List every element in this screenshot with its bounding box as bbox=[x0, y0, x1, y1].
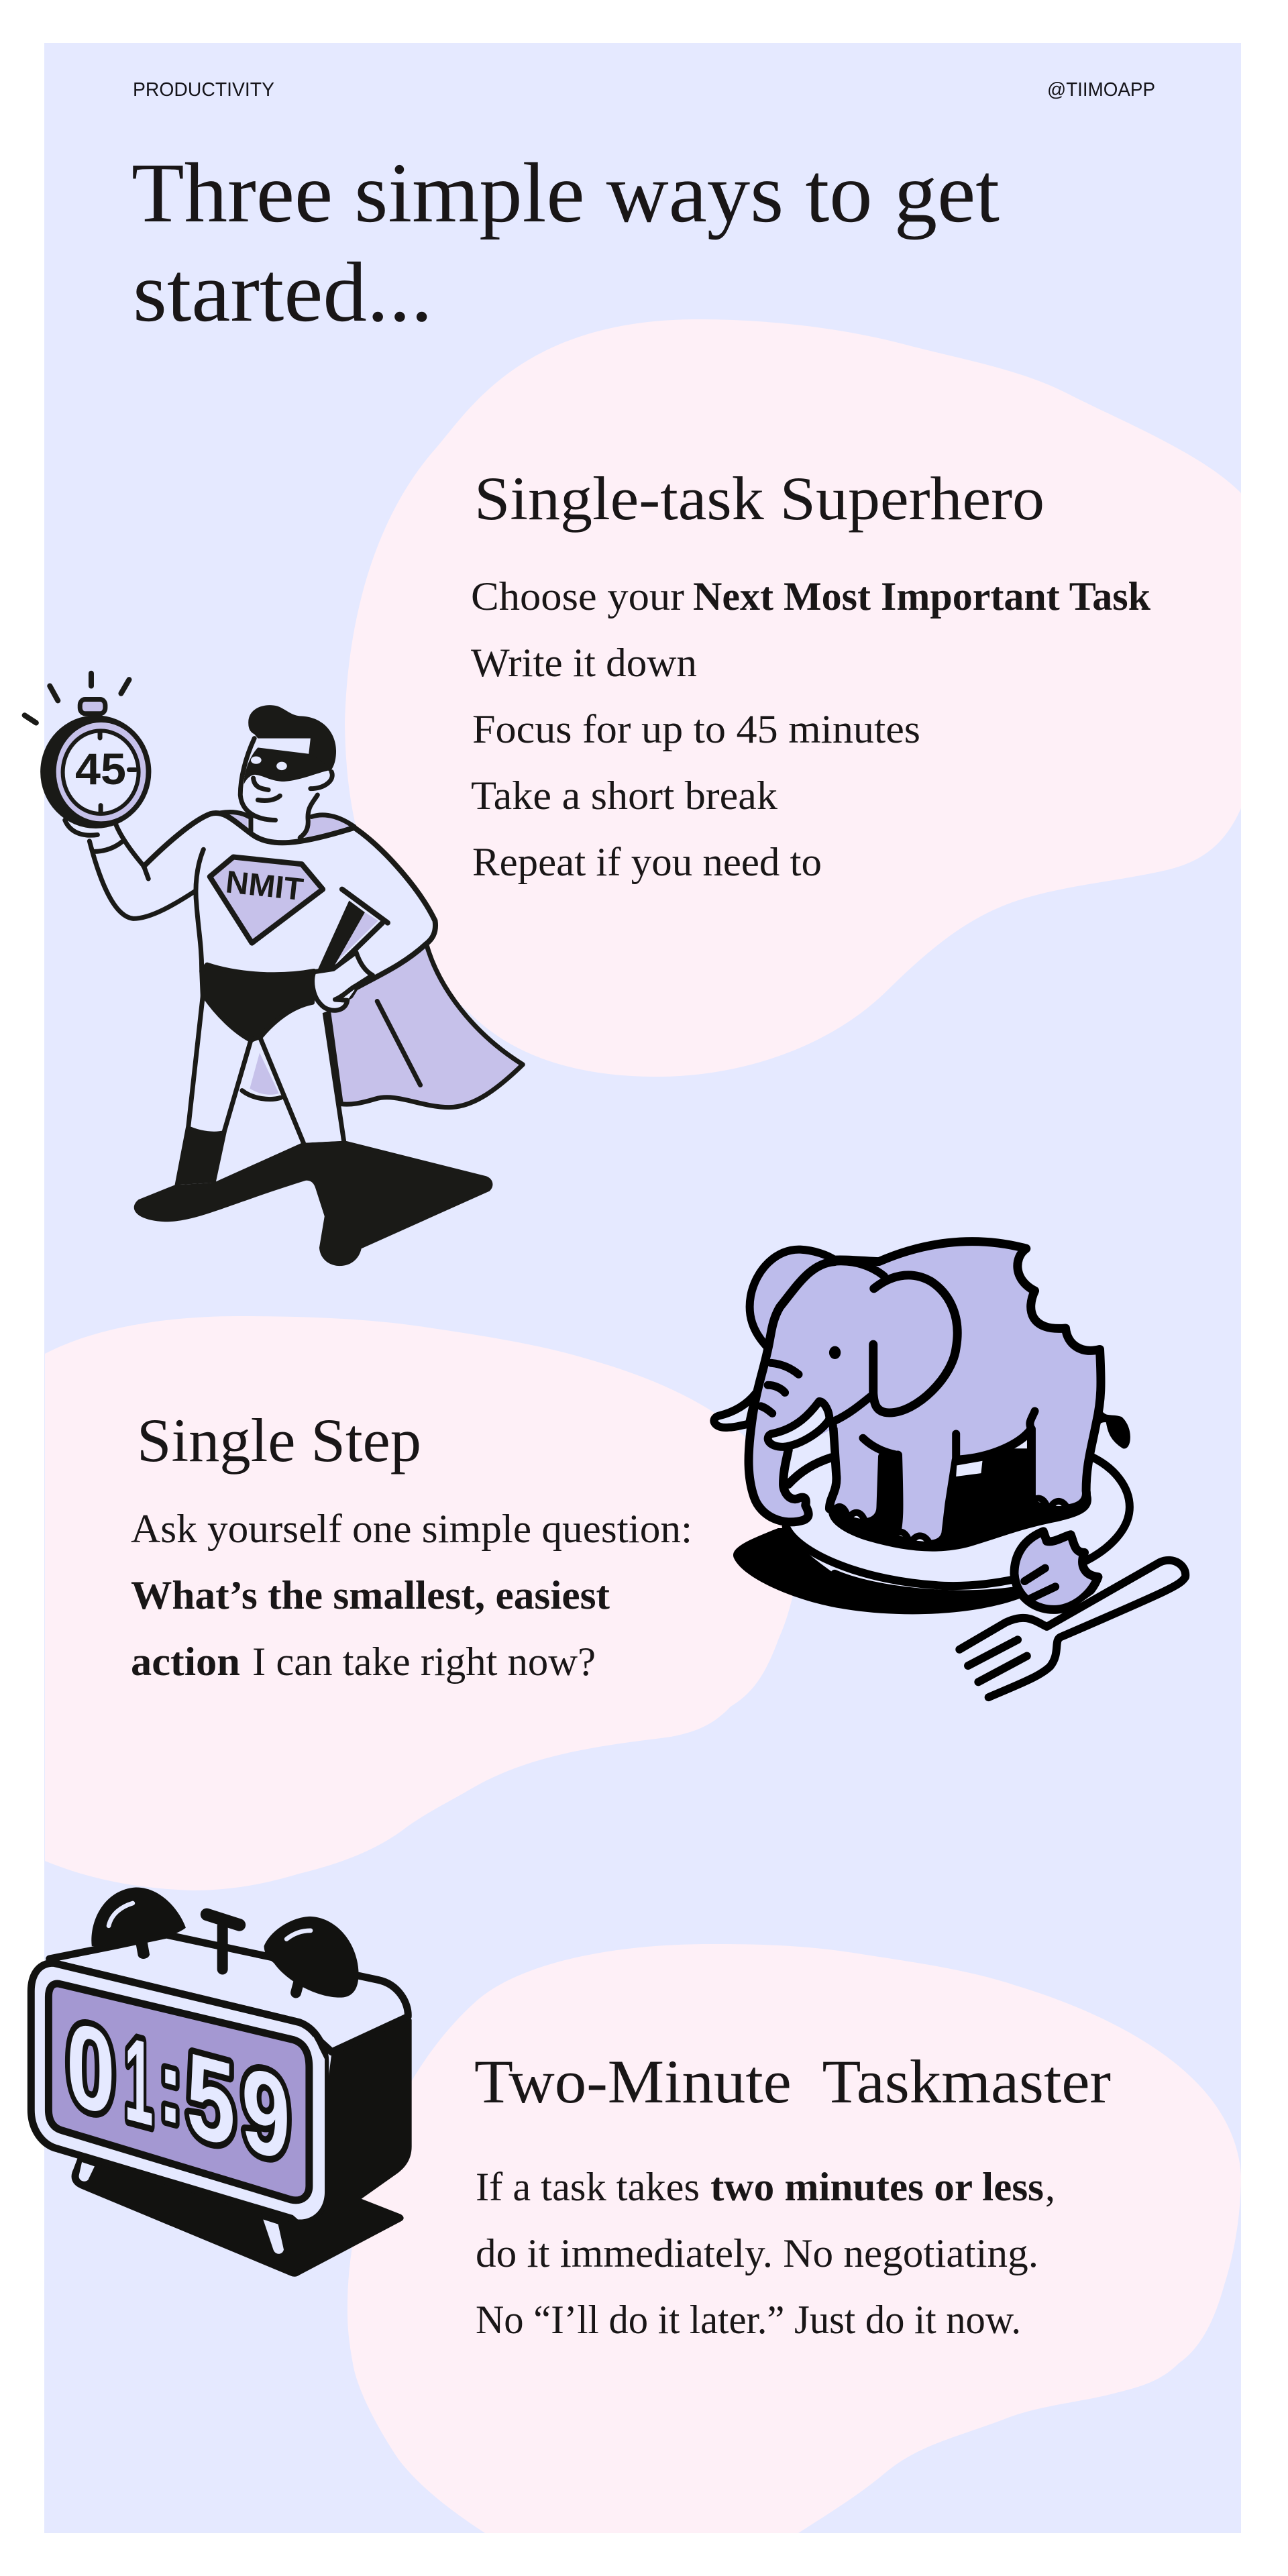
text block: two minute rule: No “I’ll do it later.” Just do it now. bbox=[476, 2298, 1021, 2342]
text block: superhero steps: Repeat if you need to bbox=[472, 840, 822, 884]
chest emblem text: NMIT bbox=[224, 863, 305, 907]
stopwatch number: 45 bbox=[75, 744, 126, 794]
text block: single step question bbox=[131, 1507, 692, 1684]
clock display digits: 0 bbox=[66, 1996, 115, 2141]
text block: superhero steps: Focus for up to 45 minutes bbox=[472, 707, 920, 751]
stopwatch bbox=[25, 674, 151, 828]
category label: PRODUCTIVITY bbox=[133, 79, 274, 101]
title bbox=[131, 146, 1000, 339]
handle label: @TIIMOAPP bbox=[1047, 79, 1155, 101]
elephant toes bbox=[834, 1499, 1068, 1546]
text block: two minute rule: two minutes or less bbox=[710, 2165, 1044, 2209]
clock display digits: 9 bbox=[241, 2041, 290, 2187]
clock display digits: 5 bbox=[186, 2027, 235, 2173]
illustration: superhero with stopwatch bbox=[25, 674, 523, 1266]
elephant head and trunk bbox=[749, 1262, 883, 1522]
text block: single step question: What’s the smallest, easiest bbox=[131, 1573, 610, 1617]
title: Three simple ways to get bbox=[131, 146, 1000, 240]
text block: superhero steps: Choose your bbox=[471, 574, 684, 619]
clock display digits bbox=[66, 1996, 290, 2187]
title: started... bbox=[133, 246, 433, 339]
text block: superhero steps: Take a short break bbox=[471, 773, 777, 818]
text block: superhero steps: Next Most Important Task bbox=[693, 574, 1151, 619]
text block: two minute rule: If a task takes bbox=[476, 2165, 700, 2209]
heading: Single-task Superhero: Single-task Superhero bbox=[474, 464, 1044, 533]
text block: superhero steps bbox=[471, 574, 1151, 884]
text block: single step question: I can take right now? bbox=[252, 1640, 596, 1684]
illustration: digital alarm clock bbox=[31, 1887, 412, 2277]
text block: superhero steps: Write it down bbox=[471, 641, 697, 685]
illustration: elephant on a plate with fork bbox=[714, 1242, 1185, 1697]
text block: two minute rule: , bbox=[1045, 2165, 1055, 2209]
heading: Two-Minute Taskmaster: Two-Minute Taskmaster bbox=[474, 2047, 1111, 2116]
heading: Single Step: Single Step bbox=[137, 1406, 421, 1474]
text block: single step question: action bbox=[131, 1640, 240, 1684]
text block: single step question: Ask yourself one simple question: bbox=[131, 1507, 692, 1551]
text block: two minute rule bbox=[476, 2165, 1055, 2342]
clock display digits: 1 bbox=[124, 2012, 153, 2152]
clock display digits: : bbox=[158, 2027, 182, 2147]
bells and winder bbox=[91, 1887, 359, 1998]
text block: two minute rule: do it immediately. No negotiating. bbox=[476, 2231, 1038, 2275]
